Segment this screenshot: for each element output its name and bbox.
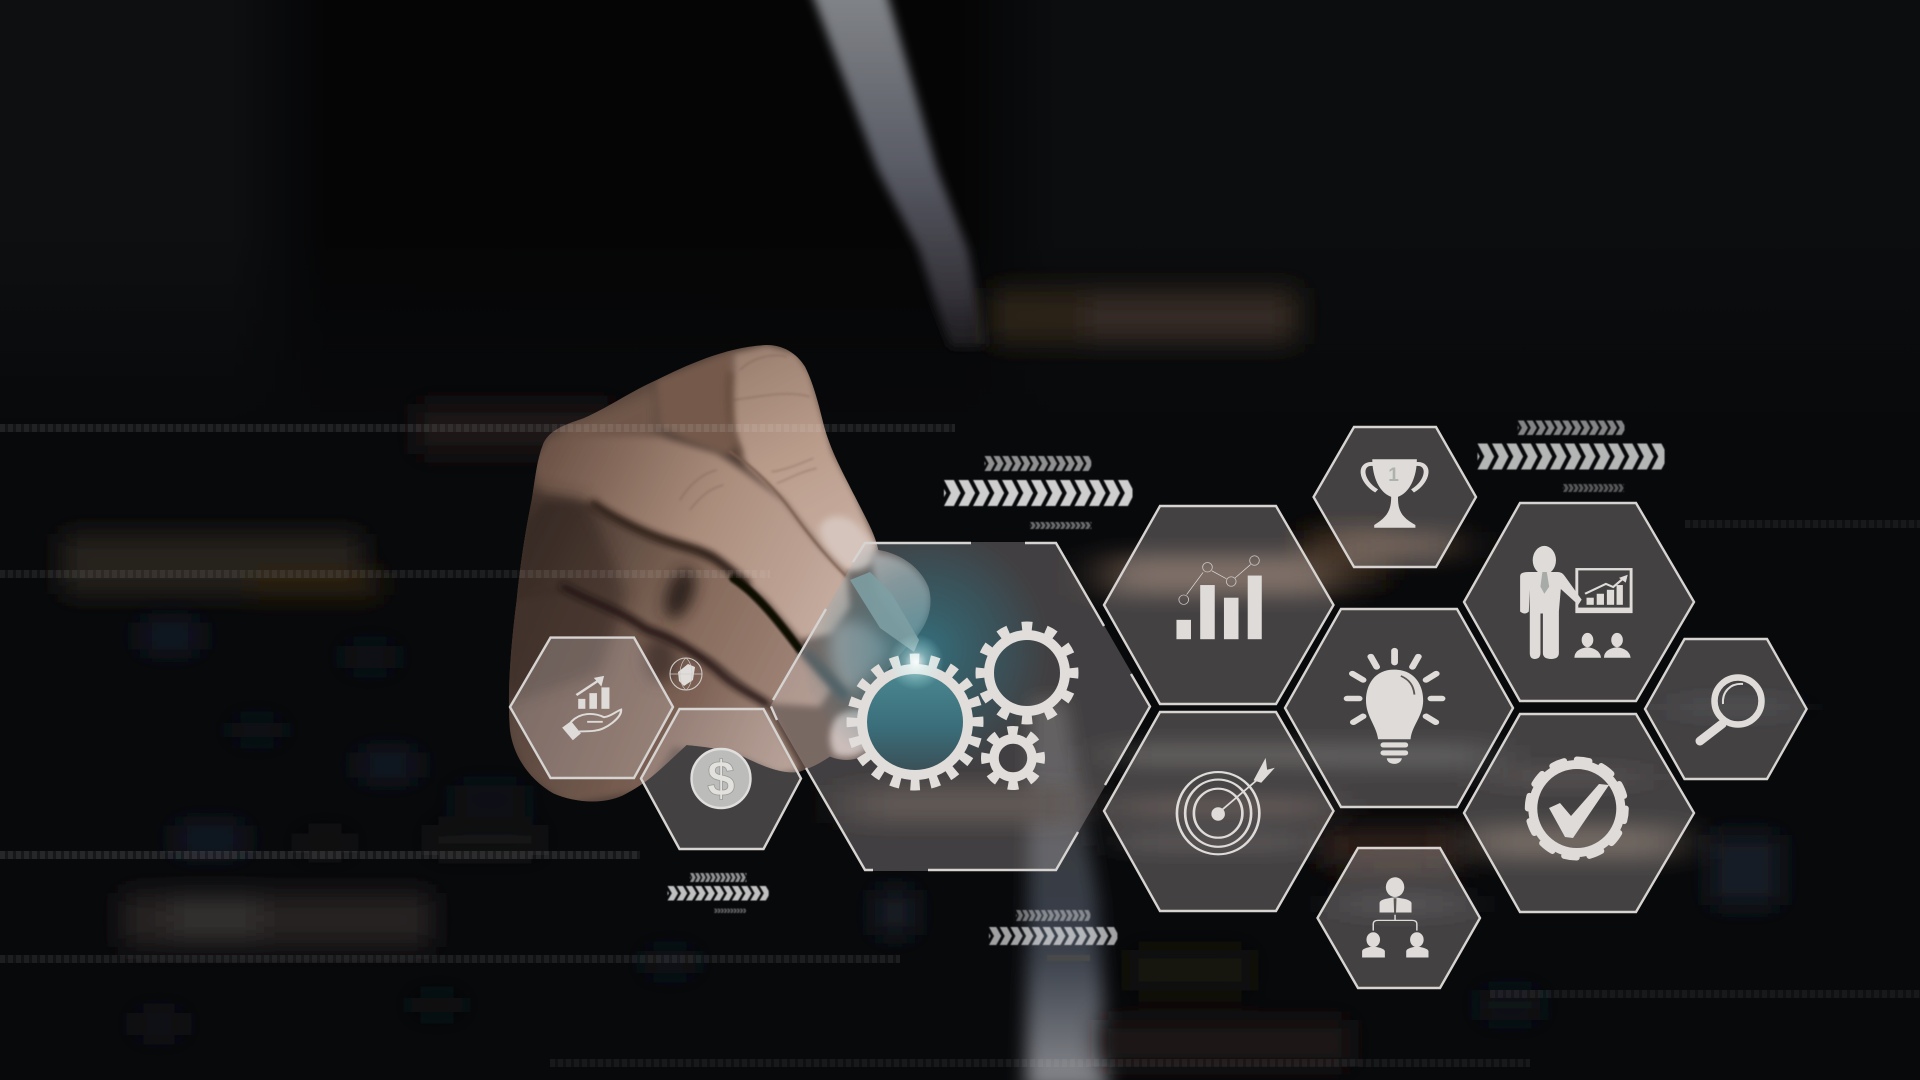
skin creases <box>680 355 817 510</box>
icon: light bulb with rays <box>1347 651 1442 764</box>
shirt light streak <box>1026 700 1108 1080</box>
panel: large gears hexagon <box>770 520 1151 871</box>
panel: target hexagon <box>1104 712 1334 911</box>
index finger base <box>657 350 743 455</box>
chevrons: above gears hexagon <box>944 456 1132 529</box>
panel: magnifier hexagon <box>1645 639 1807 779</box>
knuckle shading <box>643 564 702 683</box>
small gear <box>986 731 1040 785</box>
icon: trophy <box>1363 459 1426 528</box>
blurred blue lights <box>135 622 1780 1036</box>
middle finger <box>537 437 850 640</box>
panel: growth in hand hexagon <box>510 638 673 778</box>
panel: light bulb hexagon <box>1285 609 1513 807</box>
fingernail <box>820 516 876 570</box>
panel: trophy hexagon <box>1314 427 1476 567</box>
icon: dollar coin <box>692 749 750 808</box>
chevrons: below dollar hexagon <box>668 873 769 913</box>
finger gaps <box>563 373 847 703</box>
icon: magnifying glass <box>1700 678 1762 741</box>
binary data strips <box>0 428 1920 1063</box>
panel: presenter hexagon <box>1464 503 1694 701</box>
chevrons: bottom centre <box>989 910 1117 961</box>
trophy rank number: 1 <box>1388 465 1399 486</box>
panel: org chart hexagon <box>1318 848 1480 988</box>
broken hexagon outline <box>771 543 1150 870</box>
icon: dollar coin: $ <box>707 751 735 807</box>
icon: target with arrow <box>1177 758 1275 854</box>
teal glow <box>811 544 1033 750</box>
ring finger <box>575 519 832 710</box>
icon: rising bars and trend line <box>1176 556 1262 639</box>
medium gear <box>980 626 1074 720</box>
panel: quality check hexagon <box>1464 714 1694 912</box>
big gear <box>852 659 978 785</box>
icon: chart on open hand <box>562 676 621 740</box>
icon: small globe <box>670 658 702 690</box>
collar light streak <box>807 0 986 347</box>
panel: dollar hexagon <box>641 709 801 849</box>
teal gear centre <box>867 674 963 770</box>
light bands seen through hexagons <box>850 532 1790 913</box>
icon: team hierarchy <box>1362 877 1428 958</box>
icon: presenter with chart and audience <box>1520 546 1633 659</box>
thumb <box>870 553 930 640</box>
lower fingertip <box>830 710 877 757</box>
panel: bar chart hexagon <box>1104 506 1334 704</box>
chevrons: top right <box>1478 420 1665 492</box>
stylus <box>850 572 919 652</box>
left side shade <box>500 483 627 707</box>
shadow under stylus <box>803 650 847 698</box>
index finger <box>733 345 878 573</box>
blurred warm lights <box>62 288 1460 1066</box>
icon: approval badge with check mark <box>1528 760 1626 858</box>
dark back of hand <box>524 384 663 541</box>
light spark at stylus tip <box>888 634 944 690</box>
fingertip behind stylus <box>831 621 890 693</box>
little finger and palm edge <box>510 593 800 803</box>
hand holding a stylus <box>500 340 940 807</box>
